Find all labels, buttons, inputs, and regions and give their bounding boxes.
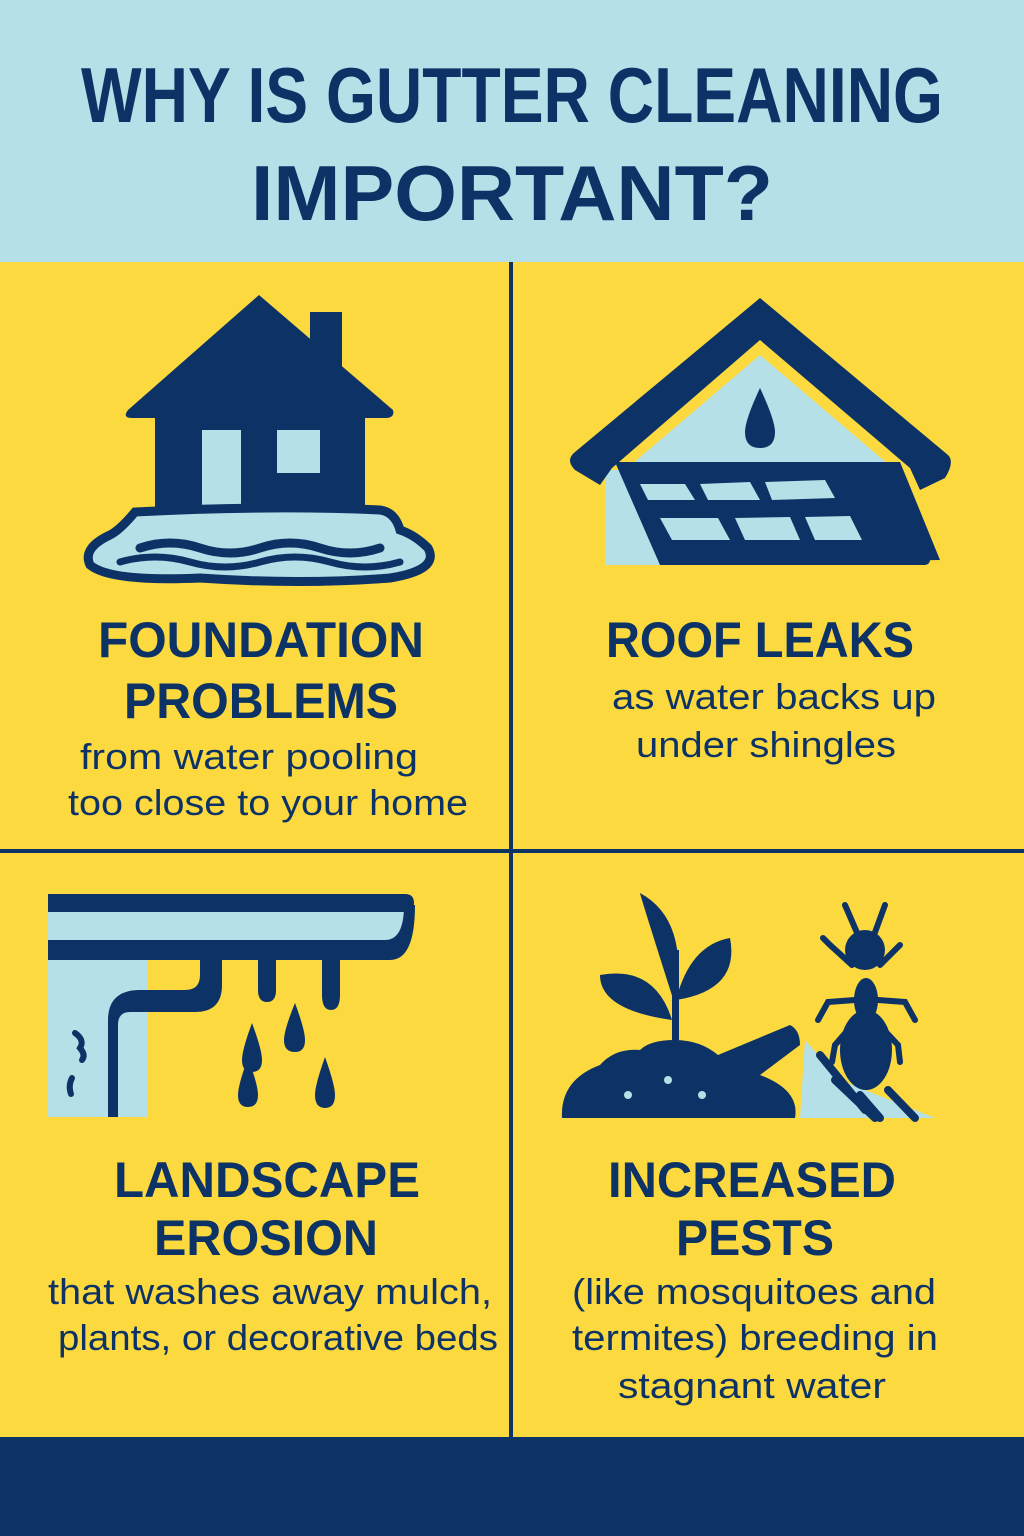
text: erosion description xyxy=(48,1271,498,1358)
text: roof description: as water backs up xyxy=(612,676,936,717)
text: roof description xyxy=(612,676,936,765)
heading: landscape erosion: LANDSCAPE xyxy=(114,1152,420,1208)
text: pests description: termites) breeding in xyxy=(572,1317,938,1358)
text: pests description: stagnant water xyxy=(618,1365,886,1406)
panel: roof leaks xyxy=(570,298,951,765)
heading: landscape erosion: EROSION xyxy=(154,1210,378,1266)
icon: overflowing gutter xyxy=(48,894,415,1117)
icon: plant and insect xyxy=(562,893,935,1118)
heading: foundation problems: PROBLEMS xyxy=(124,673,398,729)
panel: foundation problems xyxy=(68,295,468,823)
text: foundation description: from water pooling xyxy=(80,736,418,777)
icon: flooded house xyxy=(88,295,430,582)
text: erosion description: plants, or decorative beds xyxy=(58,1317,498,1358)
footer band xyxy=(0,1437,1024,1536)
text: foundation description: too close to your home xyxy=(68,782,468,823)
heading: increased pests: INCREASED xyxy=(608,1152,896,1208)
text: foundation description xyxy=(68,736,468,823)
text: roof description: under shingles xyxy=(636,724,896,765)
text: pests description: (like mosquitoes and xyxy=(572,1271,936,1312)
text: erosion description: that washes away mulch, xyxy=(48,1271,492,1312)
icon: leaking roof xyxy=(570,298,951,565)
heading: increased pests: PESTS xyxy=(676,1210,834,1266)
heading: foundation problems: FOUNDATION xyxy=(98,612,424,668)
heading: roof leaks: ROOF LEAKS xyxy=(606,612,914,668)
title: IMPORTANT? xyxy=(251,149,773,237)
header band xyxy=(0,0,1024,262)
heading: landscape erosion xyxy=(114,1152,420,1266)
title xyxy=(81,51,943,237)
text: pests description xyxy=(572,1271,938,1406)
panel: landscape erosion xyxy=(48,894,498,1358)
heading: increased pests xyxy=(608,1152,896,1266)
panel: increased pests xyxy=(562,893,938,1406)
heading: foundation problems xyxy=(98,612,424,729)
